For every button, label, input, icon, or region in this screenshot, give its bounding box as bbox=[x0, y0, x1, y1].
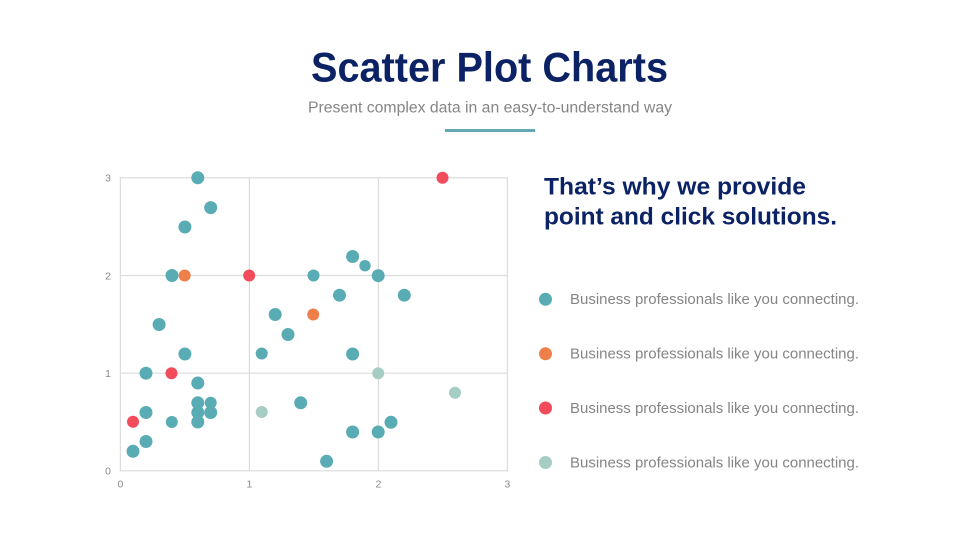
callout heading: point and click solutions. bbox=[544, 204, 837, 230]
x axis labels: 0 bbox=[117, 478, 123, 490]
y axis labels bbox=[105, 172, 111, 478]
chart grid bbox=[120, 178, 507, 471]
y axis labels: 3 bbox=[105, 172, 111, 184]
x axis labels: 2 bbox=[375, 478, 381, 490]
x axis labels: 3 bbox=[504, 478, 510, 490]
title accent line bbox=[445, 129, 535, 132]
subtitle: Present complex data in an easy-to-understand way bbox=[308, 100, 672, 116]
legend item: teal: Business professionals like you connecting. bbox=[570, 292, 859, 308]
legend item: pale green: Business professionals like you connecting. bbox=[570, 456, 859, 472]
legend item: orange: Business professionals like you connecting. bbox=[570, 346, 859, 362]
x axis labels: 1 bbox=[246, 478, 252, 490]
y axis labels: 2 bbox=[105, 270, 111, 282]
red data points bbox=[127, 172, 448, 428]
title: Scatter Plot Charts bbox=[311, 44, 668, 90]
y axis labels: 1 bbox=[105, 368, 111, 380]
teal data points bbox=[126, 171, 411, 468]
legend bbox=[539, 292, 859, 472]
x axis labels bbox=[117, 478, 510, 490]
y axis labels: 0 bbox=[105, 466, 111, 478]
legend item: red: Business professionals like you connecting. bbox=[570, 401, 859, 417]
callout heading: That’s why we provide bbox=[544, 174, 806, 200]
callout heading bbox=[544, 174, 837, 230]
orange data points bbox=[179, 270, 319, 320]
scatter chart bbox=[105, 171, 510, 491]
pale green data points bbox=[256, 367, 461, 418]
